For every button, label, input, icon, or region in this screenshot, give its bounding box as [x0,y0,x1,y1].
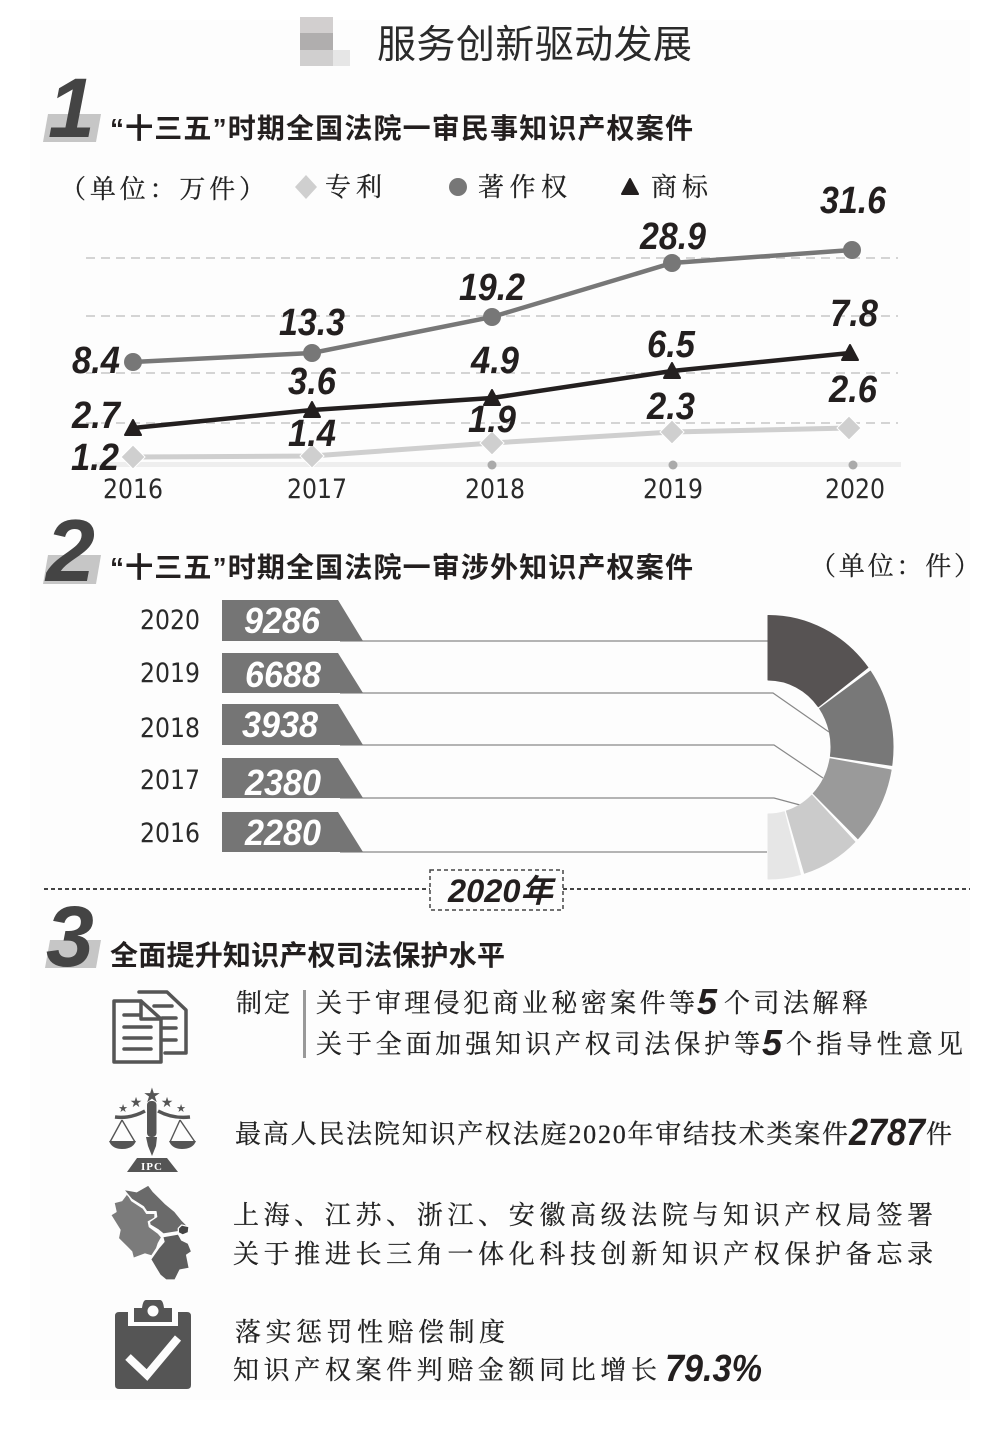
title: 服务创新驱动发展 [377,24,692,67]
data labels: 4.9 [470,340,519,382]
panel: judicial protection section [45,889,963,1390]
data labels: 28.9 [639,216,706,258]
text: Yangtze delta memorandum [233,1201,933,1269]
text: punitive damages: 79.3% [665,1348,762,1390]
unit label: （单位：件） [810,552,980,581]
text: punitive damages: 落实惩罚性赔偿制度 [235,1318,505,1347]
year labels: 2016 [140,818,200,849]
year labels: 2018 [140,713,200,744]
year labels [140,605,200,849]
legend [60,173,709,204]
text: enacted documents: 制定 [236,989,290,1018]
series: patents [121,416,861,469]
legend: （单位：万件） [60,175,265,204]
legend: 商标 [651,173,709,202]
icon: clipboard check [115,1300,191,1389]
blurred logo mosaic [300,17,350,66]
divider with 2020 label [44,866,970,912]
icon: documents [114,992,186,1062]
icon: IPC scales: ★ [118,1102,128,1115]
text: punitive damages [233,1318,762,1390]
x axis years: 2020 [825,474,885,505]
data labels: 8.4 [72,340,120,382]
year labels: 2017 [140,765,200,796]
data labels: 13.3 [279,302,345,344]
data labels: 2.3 [646,386,695,428]
section number 2: 2 [44,501,95,600]
data labels: 31.6 [820,180,887,222]
text: enacted documents: 个司法解释 [724,989,868,1018]
text: enacted documents [236,981,963,1063]
icon: IPC scales [109,1083,196,1173]
text: Yangtze delta memorandum: 上海、江苏、浙江、安徽高级法院与知识产权局签署 [233,1201,933,1230]
icon: IPC scales: ★ [143,1083,161,1107]
text: punitive damages: 知识产权案件判赔金额同比增长 [233,1356,657,1385]
text: enacted documents: 关于全面加强知识产权司法保护等 [316,1030,760,1059]
year bars: 2380 [244,762,321,803]
data labels: 1.4 [288,413,336,455]
divider with 2020 label: 2020年 [447,866,556,912]
data labels: 1.2 [71,437,119,479]
icon: IPC scales: IPC [141,1161,163,1173]
x axis years: 2018 [465,474,525,505]
text: technical cases: 最高人民法院知识产权法庭2020年审结技术类案件 [235,1120,848,1149]
data labels [71,180,887,479]
heading: section 2: “十三五”时期全国法院一审涉外知识产权案件 [110,552,693,583]
series: trademarks [125,345,858,435]
year bars: 3938 [242,704,318,745]
data labels: 3.6 [288,361,337,403]
data labels: 2.7 [71,395,122,437]
data labels: 2.6 [828,369,878,411]
data labels: 6.5 [647,324,696,366]
legend: 著作权 [478,173,567,202]
text: enacted documents: 关于审理侵犯商业秘密案件等 [316,989,695,1018]
data labels: 1.9 [468,399,516,441]
semicircle segments [768,615,893,879]
year bars: 6688 [245,654,321,695]
text: enacted documents: 个指导性意见 [786,1030,963,1059]
x axis years: 2016 [103,474,163,505]
panel: civil IP cases line chart section [43,61,901,505]
connector lines [340,641,829,852]
section number 3: 3 [46,889,94,985]
x axis years [103,474,885,505]
year bars: 2280 [244,812,321,853]
text: technical cases: 件 [926,1120,952,1149]
panel: foreign-related IP cases section [43,501,980,879]
year labels: 2019 [140,658,200,689]
data labels: 7.8 [830,293,879,335]
text: enacted documents: 5 [697,981,718,1022]
text: technical cases: 2787 [848,1112,927,1154]
legend: 专利 [325,173,382,202]
line chart [71,180,901,505]
x axis years: 2017 [287,474,347,505]
data labels: 19.2 [459,267,525,309]
icon: Yangtze delta map [111,1185,192,1280]
heading: section 3: 全面提升知识产权司法保护水平 [110,940,505,971]
section number 1: 1 [48,61,95,155]
icon: IPC scales: ★ [161,1095,173,1111]
year bars [222,600,363,853]
text: Yangtze delta memorandum: 关于推进长三角一体化科技创新知识产权保护备忘录 [233,1240,933,1269]
x axis years: 2019 [643,474,703,505]
heading: section 1: “十三五”时期全国法院一审民事知识产权案件 [110,113,693,144]
icon: IPC scales: ★ [130,1095,142,1111]
series: copyright [124,241,861,371]
text: technical cases [235,1112,952,1154]
year bars: 9286 [244,600,321,641]
icon: IPC scales: ★ [176,1102,186,1115]
text: enacted documents: 5 [762,1022,783,1063]
year labels: 2020 [140,605,200,636]
